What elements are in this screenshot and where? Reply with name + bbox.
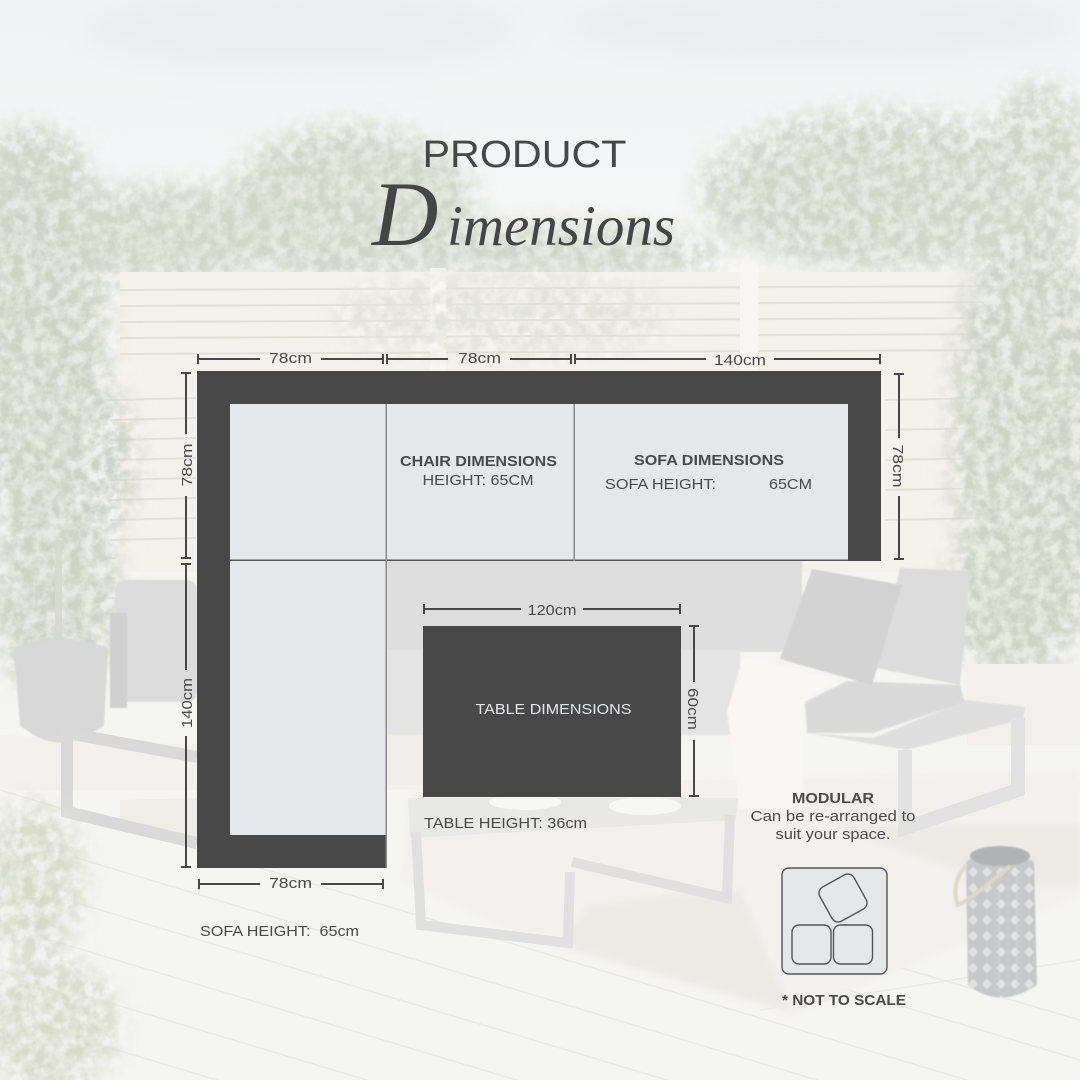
sofa dimensions text: SOFA HEIGHT: [605, 476, 716, 493]
sofa dimensions text: SOFA DIMENSIONS [634, 452, 784, 469]
dimension: bottom 78cm: 78cm [269, 875, 312, 892]
table height label: TABLE HEIGHT: 36cm [424, 815, 587, 832]
icon: modular layout [782, 868, 887, 974]
dimension: table depth 60cm: 60cm [684, 688, 701, 730]
dimension: left 78cm: 78cm [179, 444, 196, 486]
modular caption: Can be re-arranged to [750, 808, 916, 825]
background: outdoor sofa and table [14, 560, 1025, 943]
sofa plan: L-shaped dark frame [197, 371, 881, 868]
modular caption: MODULAR [792, 790, 874, 807]
not to scale note: * NOT TO SCALE [782, 992, 906, 1009]
chair dimensions text: CHAIR DIMENSIONS [400, 453, 557, 470]
background: lantern [955, 846, 1037, 998]
chair dimensions text [400, 453, 557, 489]
table plan [423, 626, 681, 797]
heading: dimensions script: D [370, 163, 438, 265]
dimension: left 140cm: 140cm [179, 678, 196, 728]
sofa dimensions text: 65CM [769, 476, 812, 493]
heading: product: PRODUCT [422, 134, 626, 176]
title [370, 134, 675, 265]
heading: dimensions script: imensions [447, 195, 675, 258]
table plan: TABLE DIMENSIONS [476, 701, 632, 718]
chair dimensions text: HEIGHT: 65CM [422, 472, 534, 489]
sofa height label: SOFA HEIGHT: 65cm [200, 923, 359, 940]
dimension: top 78cm left: 78cm [269, 350, 312, 367]
sofa plan: light seat panels [230, 404, 848, 868]
modular caption: suit your space. [776, 826, 890, 843]
dimension: table width 120cm: 120cm [528, 602, 576, 619]
sofa dimensions text [605, 452, 812, 493]
modular caption [750, 790, 916, 843]
dimension: right 78cm: 78cm [889, 444, 906, 488]
dimension: top 140cm: 140cm [714, 352, 766, 369]
dimension: top 78cm middle: 78cm [458, 350, 501, 367]
background: foreground plants [0, 802, 120, 1080]
